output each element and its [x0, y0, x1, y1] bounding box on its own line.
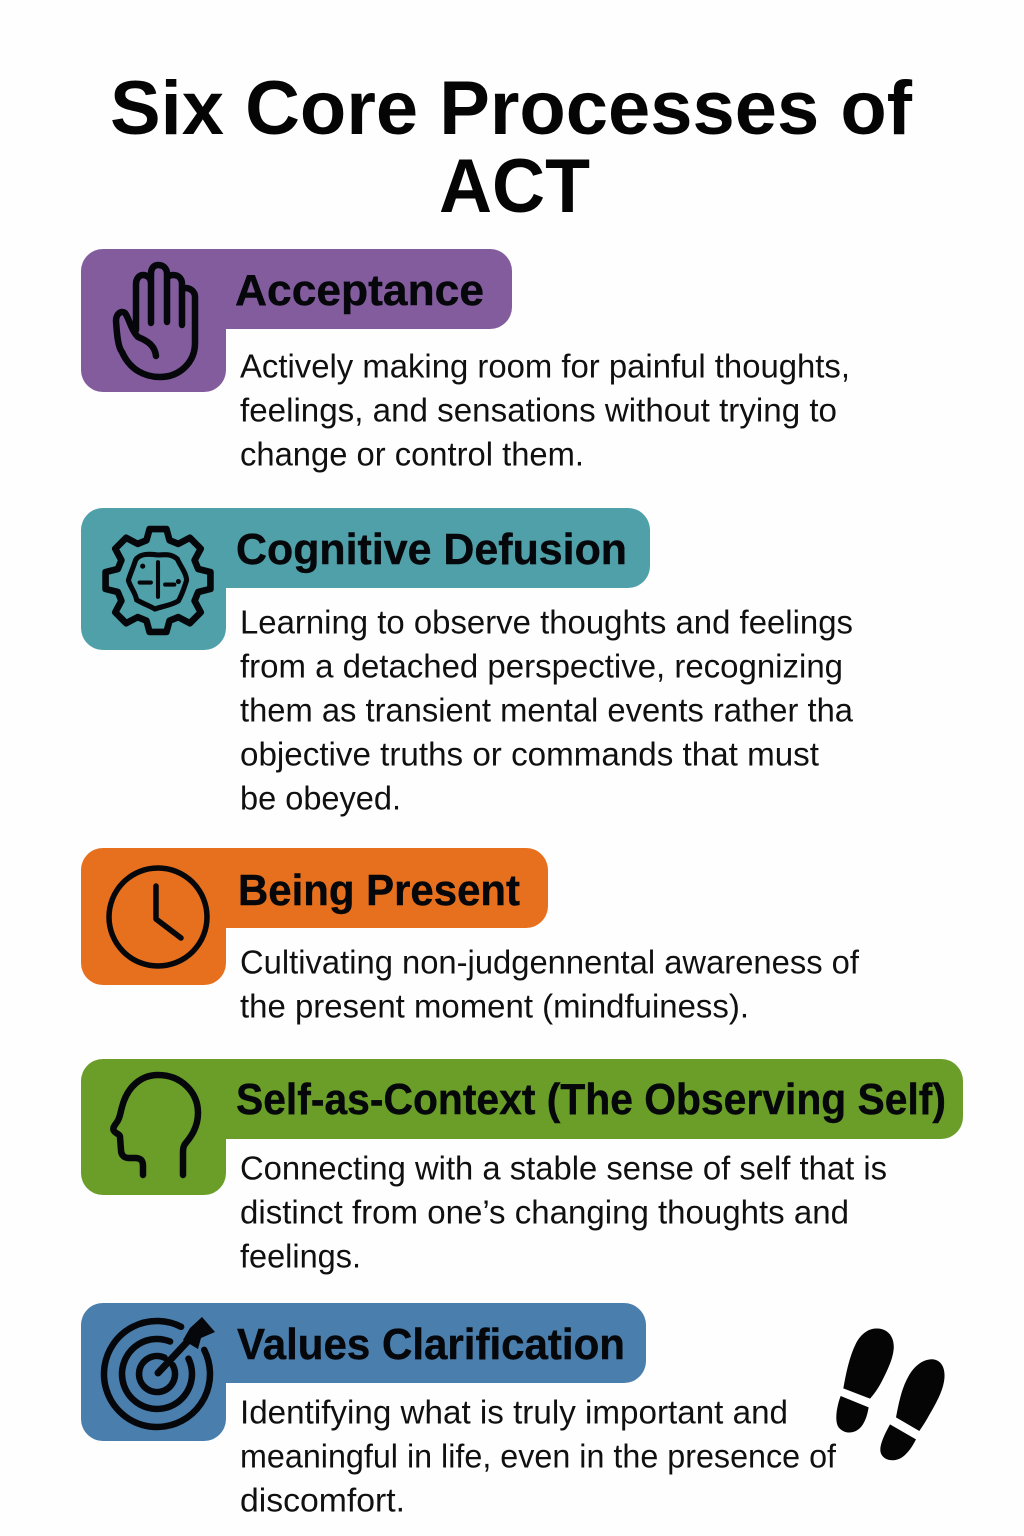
- text: cognitive defusion description: them as transient mental events rather tha: [240, 692, 853, 730]
- text: acceptance description: feelings, and sensations without trying to: [240, 392, 837, 430]
- text: acceptance description: change or control them.: [240, 436, 584, 474]
- header shape: acceptance: [81, 249, 512, 392]
- text: self-as-context description: feelings.: [240, 1238, 361, 1276]
- icon: target with arrow: [104, 1317, 215, 1427]
- panel: acceptance: [81, 249, 850, 474]
- icon: gear with brain: [106, 529, 210, 632]
- header shape: self-as-context: [81, 1059, 963, 1195]
- heading: self-as-context: Self-as-Context (The Observing Self): [236, 1075, 946, 1124]
- text: cognitive defusion description: [240, 604, 853, 818]
- text: self-as-context description: Connecting with a stable sense of self that is: [240, 1150, 887, 1188]
- icon: head profile: [113, 1075, 198, 1175]
- icon: clock: [109, 868, 207, 966]
- icon: raised hand: [116, 265, 195, 377]
- text: self-as-context description: [240, 1150, 887, 1276]
- text: values clarification description: discomfort.: [240, 1482, 405, 1520]
- icon: footprints: [836, 1328, 945, 1460]
- text: self-as-context description: distinct from one’s changing thoughts and: [240, 1194, 849, 1232]
- text: acceptance description: Actively making room for painful thoughts,: [240, 348, 850, 386]
- text: cognitive defusion description: objective truths or commands that must: [240, 736, 820, 774]
- text: cognitive defusion description: Learning to observe thoughts and feelings: [240, 604, 853, 642]
- header shape: cognitive defusion: [81, 508, 650, 650]
- text: values clarification description: meaningful in life, even in the presence of: [240, 1438, 837, 1476]
- text: acceptance description: [240, 348, 850, 474]
- text: values clarification description: [240, 1394, 837, 1520]
- text: values clarification description: Identifying what is truly important and: [240, 1394, 788, 1432]
- title: ACT: [439, 144, 590, 229]
- heading: cognitive defusion: Cognitive Defusion: [236, 525, 627, 574]
- heading: values clarification: Values Clarification: [237, 1320, 625, 1369]
- panel: cognitive defusion: [81, 508, 853, 818]
- heading: acceptance: Acceptance: [235, 266, 484, 315]
- title: [110, 66, 913, 229]
- header shape: values clarification: [81, 1303, 646, 1441]
- panel: being present: [81, 848, 860, 1026]
- panel: values clarification: [81, 1303, 837, 1520]
- text: being present description: Cultivating non-judgennental awareness of: [240, 944, 860, 982]
- title: Six Core Processes of: [110, 66, 913, 151]
- text: being present description: [240, 944, 860, 1026]
- heading: being present: Being Present: [238, 866, 520, 915]
- text: being present description: the present moment (mindfuiness).: [240, 988, 749, 1026]
- text: cognitive defusion description: be obeyed.: [240, 780, 401, 818]
- panel: self-as-context: [81, 1059, 963, 1276]
- text: cognitive defusion description: from a detached perspective, recognizing: [240, 648, 843, 686]
- header shape: being present: [81, 848, 548, 985]
